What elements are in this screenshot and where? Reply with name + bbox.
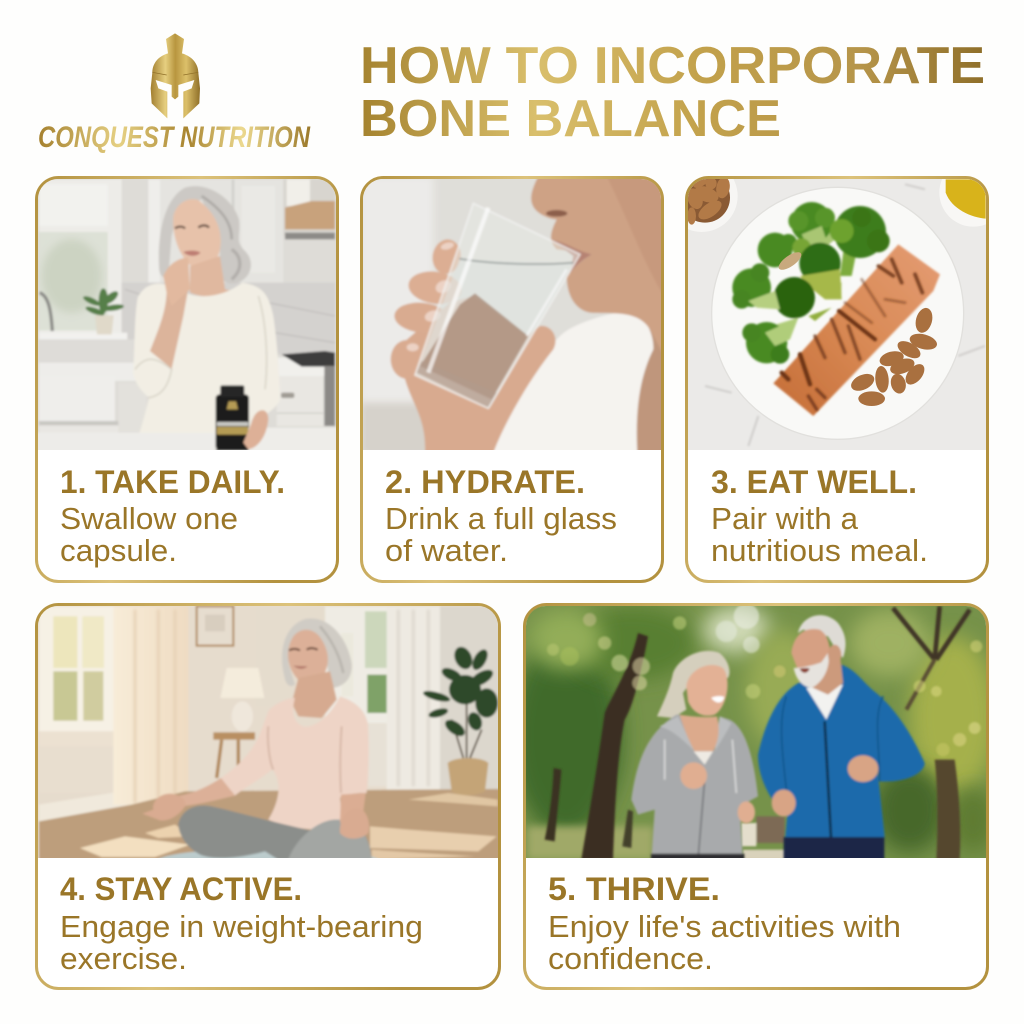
step 3 text bbox=[711, 464, 928, 568]
panel: step 2 hydrate bbox=[360, 176, 664, 582]
photo: salmon, broccoli and almonds plate bbox=[666, 159, 1007, 456]
step 4 text: 4. STAY ACTIVE. bbox=[60, 871, 302, 907]
panel: step 5 thrive bbox=[510, 603, 996, 988]
step 3 text: nutritious meal. bbox=[711, 533, 928, 568]
step 5 text: confidence. bbox=[548, 941, 713, 976]
photo: woman taking capsule in kitchen bbox=[35, 176, 339, 456]
step 2 text bbox=[385, 464, 617, 568]
step 4 text: exercise. bbox=[60, 941, 187, 976]
step 4 text bbox=[60, 871, 423, 976]
panel: step 1 take daily bbox=[35, 176, 339, 582]
logo: Conquest Nutrition bbox=[38, 33, 311, 154]
photo: senior couple jogging in park bbox=[510, 603, 996, 863]
icon: spartan helmet bbox=[151, 33, 200, 118]
panel: step 3 eat well bbox=[666, 159, 1007, 582]
step 5 text bbox=[548, 871, 901, 976]
step 2 text: 2. HYDRATE. bbox=[385, 464, 585, 500]
photo: woman meditating at home bbox=[35, 603, 501, 876]
step 1 text bbox=[60, 464, 285, 568]
title: BONE BALANCE bbox=[360, 90, 781, 148]
logo wordmark: CONQUEST NUTRITION bbox=[38, 121, 311, 154]
panel: step 4 stay active bbox=[35, 603, 501, 988]
step 1 text: capsule. bbox=[60, 533, 177, 568]
photo: woman drinking water bbox=[360, 176, 664, 456]
step 2 text: of water. bbox=[385, 533, 508, 568]
title bbox=[360, 37, 985, 148]
title: HOW TO INCORPORATE bbox=[360, 37, 985, 95]
step 5 text: 5. THRIVE. bbox=[548, 871, 720, 907]
step 3 text: 3. EAT WELL. bbox=[711, 464, 917, 500]
step 4 text: Engage in weight-bearing bbox=[60, 909, 423, 944]
step 5 text: Enjoy life's activities with bbox=[548, 909, 901, 944]
step 1 text: Swallow one bbox=[60, 501, 238, 536]
step 2 text: Drink a full glass bbox=[385, 501, 617, 536]
step 1 text: 1. TAKE DAILY. bbox=[60, 464, 285, 500]
step 3 text: Pair with a bbox=[711, 501, 859, 536]
